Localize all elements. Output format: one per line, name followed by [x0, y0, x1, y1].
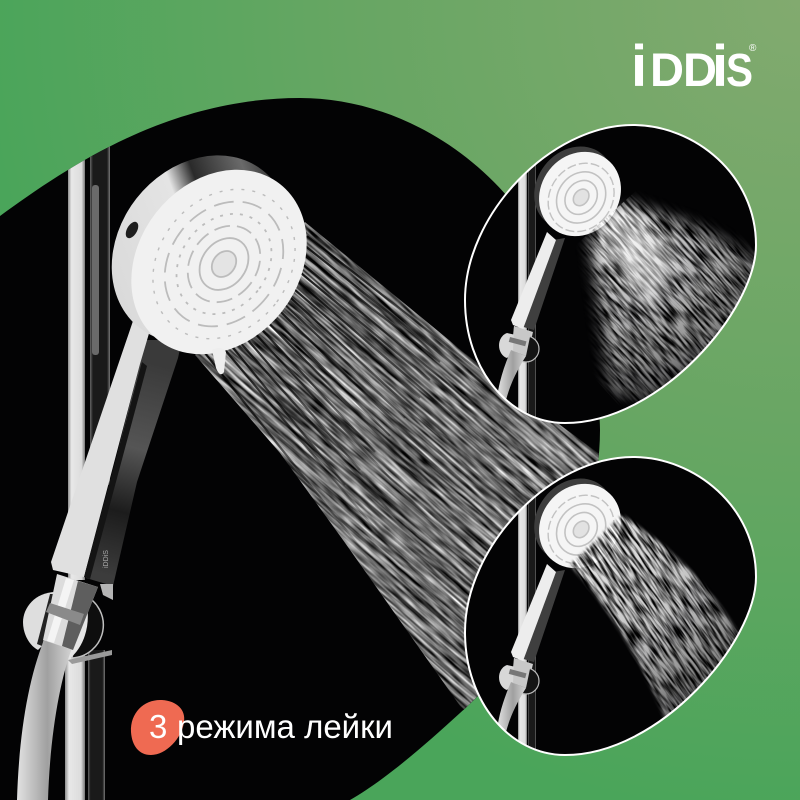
logo — [631, 34, 757, 99]
brand on handle: iDDiS — [103, 550, 110, 568]
mist core — [600, 205, 680, 310]
main black photo panel — [0, 98, 600, 800]
logo: ® — [749, 43, 757, 54]
slide bar — [65, 140, 110, 800]
callout: 3 modes — [131, 700, 393, 755]
rain spray — [568, 514, 738, 718]
hose — [17, 640, 72, 800]
callout: 3 modes: 3 — [149, 708, 167, 745]
holder right ring — [72, 595, 103, 658]
inset: wide mist mode — [464, 124, 757, 424]
spray gaps — [197, 236, 606, 648]
logo: D — [683, 43, 717, 96]
callout: 3 modes: режима лейки — [177, 708, 393, 745]
holder left disc — [23, 592, 54, 650]
inset: arc rain mode — [465, 457, 766, 772]
logo: i — [712, 34, 728, 99]
hand shower main — [17, 120, 343, 800]
neck — [43, 574, 98, 650]
logo: i — [631, 34, 647, 99]
head rim — [112, 155, 272, 337]
head face — [132, 170, 307, 354]
handle — [86, 340, 182, 586]
mist spray — [580, 194, 754, 404]
mode switch — [212, 350, 226, 374]
holder clip — [46, 603, 84, 625]
water spray main — [195, 222, 599, 710]
logo: S — [726, 44, 753, 96]
logo: D — [650, 43, 684, 96]
